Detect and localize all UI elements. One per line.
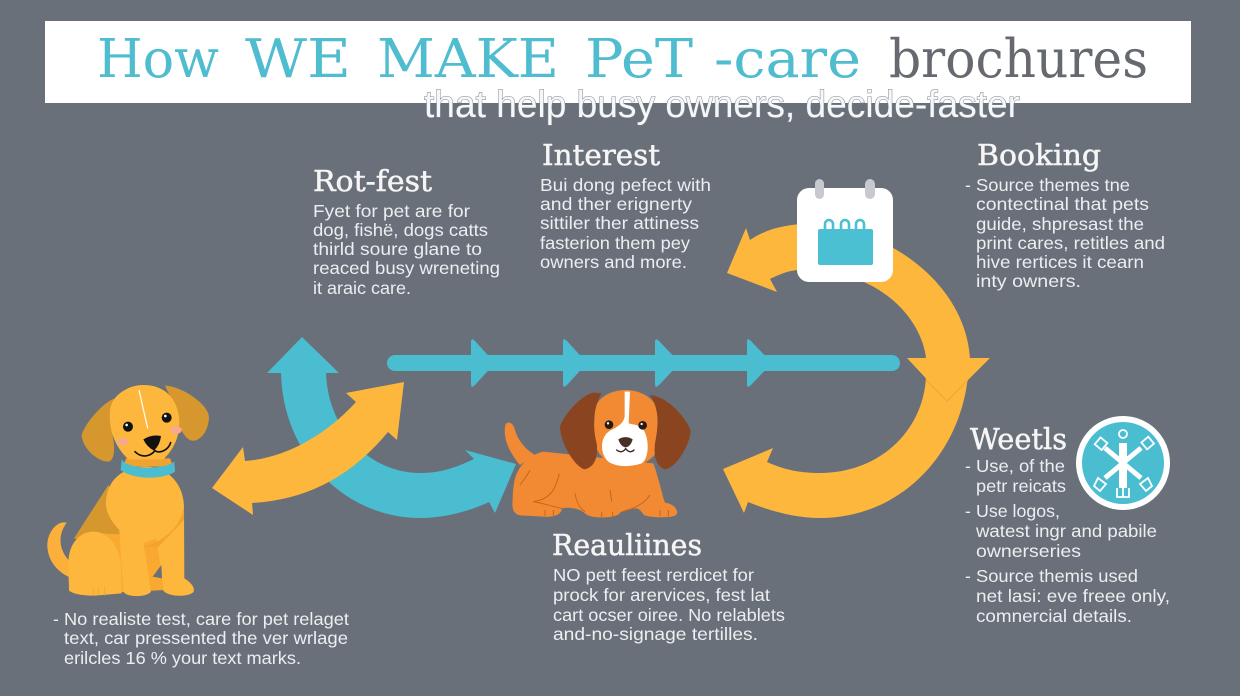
subtitle: that help busy owners, decide-faster	[424, 84, 1020, 126]
text block: bottom-left note: erilcles 16 % your text marks.	[64, 648, 301, 668]
title banner: brochures	[889, 29, 1148, 90]
panel: Booking	[965, 138, 1165, 291]
illustration: yellow sitting dog	[47, 385, 209, 596]
icon: calendar	[797, 179, 893, 282]
heading: Rot-fest: Rot-fest	[313, 164, 432, 198]
arrow: yellow double-headed arrow	[212, 382, 404, 515]
text block: Rot-fest body: Fyet for pet are for	[313, 201, 470, 221]
text block: bottom-left note: text, car pressented the ver wrlage	[64, 628, 348, 648]
text block: Interest body: owners and more.	[540, 252, 687, 272]
text block: Reauliines body: NO pett feest rerdicet for	[553, 565, 754, 585]
text block: Reauliines body: cart ocser oiree. No relablets	[553, 605, 785, 625]
text block: Booking body: -	[965, 175, 971, 195]
panel: Weetls	[965, 422, 1170, 626]
text block: Interest body	[540, 175, 711, 272]
text block: Weetls body: -	[965, 566, 971, 586]
heading: Interest: Interest	[542, 138, 660, 172]
panel: Rot-fest	[313, 164, 500, 298]
text block: Rot-fest body: thirld soure glane to	[313, 239, 482, 259]
title banner	[45, 21, 1191, 103]
text block: Weetls body: Source themis used	[976, 566, 1138, 586]
text block: Weetls body: net lasi: eve freee only,	[976, 586, 1170, 606]
text block: Rot-fest body: dog, fishë, dogs catts	[313, 220, 488, 240]
arrow: teal U-turn arrow	[267, 337, 516, 518]
heading: Weetls: Weetls	[970, 422, 1067, 456]
illustration: orange lying puppy	[505, 390, 691, 518]
text block: Booking body: guide, shpresast the	[976, 214, 1144, 234]
text block: Reauliines body: prock for arervices, fest lat	[553, 585, 770, 605]
text block: Interest body: and ther erignerty	[540, 194, 692, 214]
text block: Weetls body: Use, of the	[976, 456, 1065, 476]
heading: Reauliines: Reauliines	[552, 528, 702, 562]
text block: Weetls body: -	[965, 456, 971, 476]
text block: Rot-fest body: it araic care.	[313, 278, 411, 298]
text block: Reauliines body: and-no-signage tertilles.	[553, 624, 758, 644]
text block: Booking body: hive rertices it cearn	[976, 252, 1144, 272]
text block: Booking body: Source themes tne	[976, 175, 1130, 195]
text block: Booking body	[965, 175, 1165, 291]
text block: Booking body: inty owners.	[976, 271, 1081, 291]
text block: Interest body: fasterion them pey	[540, 233, 690, 253]
title banner: MAKE	[377, 29, 559, 90]
text block: Reauliines body	[553, 565, 785, 644]
text block: Booking body: contectinal that pets	[976, 194, 1149, 214]
arrow: yellow upper arc	[727, 224, 990, 401]
text block: Weetls body: petr reicats	[976, 476, 1066, 496]
text block: Weetls body: watest ingr and pabile	[975, 521, 1157, 541]
title banner: How	[97, 29, 219, 90]
title banner: WE	[245, 29, 351, 90]
text block: bottom-left note	[53, 609, 349, 668]
title banner: PeT	[585, 29, 693, 90]
panel: Reauliines	[552, 528, 785, 644]
text block: bottom-left note: -	[53, 609, 59, 629]
icon: tools badge	[1076, 416, 1170, 510]
text block: Weetls body: Use logos,	[976, 501, 1060, 521]
title banner: -care	[714, 29, 861, 90]
text block: Rot-fest body: reaced busy wreneting	[313, 258, 500, 278]
text block: Weetls body: ownerseries	[976, 541, 1081, 561]
panel: Interest	[540, 138, 711, 272]
arrow: teal horizontal timeline	[387, 339, 900, 387]
text block: Interest body: sittiler ther attiness	[540, 213, 699, 233]
heading: Booking: Booking	[977, 138, 1101, 172]
text block: Booking body: print cares, retitles and	[976, 233, 1165, 253]
text block: Weetls body: comnercial details.	[976, 606, 1132, 626]
arrow: yellow lower arc	[723, 376, 968, 518]
text block: Interest body: Bui dong pefect with	[540, 175, 711, 195]
dog tail	[47, 522, 72, 578]
text block: bottom-left note: No realiste test, care for pet relaget	[64, 609, 349, 629]
dog collar	[121, 459, 175, 478]
text block: Weetls body: -	[965, 501, 971, 521]
text block: Weetls body	[965, 456, 1170, 626]
text block: Rot-fest body	[313, 201, 500, 298]
